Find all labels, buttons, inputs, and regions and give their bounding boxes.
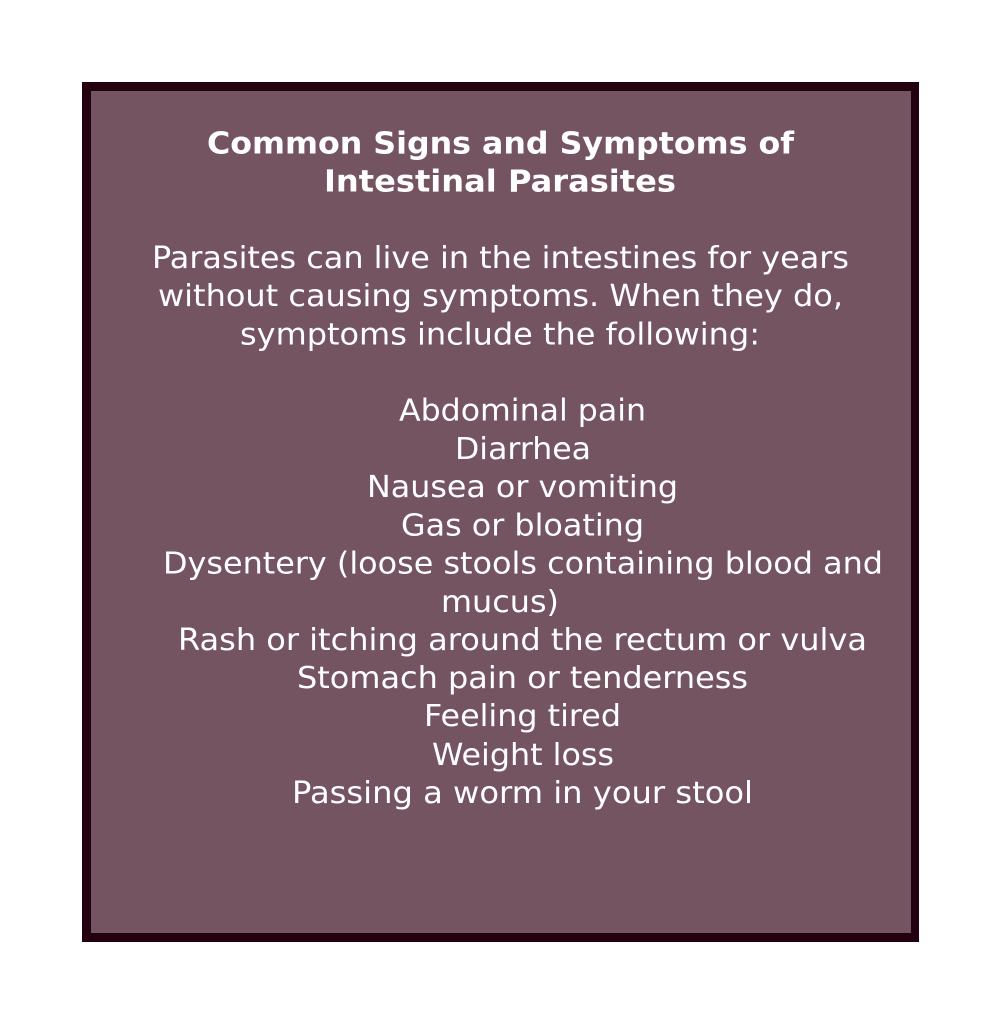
- intro text: symptoms include the following:: [240, 318, 760, 352]
- symptoms list: Nausea or vomiting: [367, 470, 678, 505]
- intro text: without causing symptoms. When they do,: [158, 279, 843, 314]
- panel: symptoms card: [82, 82, 919, 942]
- symptoms list: Abdominal pain: [399, 394, 646, 428]
- symptoms list: Weight loss: [432, 738, 614, 773]
- symptoms list: [163, 394, 883, 811]
- title: [207, 126, 795, 200]
- symptoms list: Diarrhea: [455, 432, 591, 467]
- symptoms list: Stomach pain or tenderness: [297, 661, 748, 696]
- symptoms list: Dysentery (loose stools containing blood and: [163, 546, 883, 582]
- intro text: Parasites can live in the intestines for years: [152, 241, 849, 276]
- symptoms list: Feeling tired: [424, 699, 621, 734]
- symptoms list: Rash or itching around the rectum or vulva: [178, 623, 867, 658]
- symptoms list: Passing a worm in your stool: [292, 776, 753, 811]
- intro text: [152, 241, 849, 352]
- title: Intestinal Parasites: [324, 164, 676, 200]
- title: Common Signs and Symptoms of: [207, 126, 795, 162]
- symptoms list: mucus): [441, 585, 559, 620]
- symptoms list: Gas or bloating: [401, 508, 644, 544]
